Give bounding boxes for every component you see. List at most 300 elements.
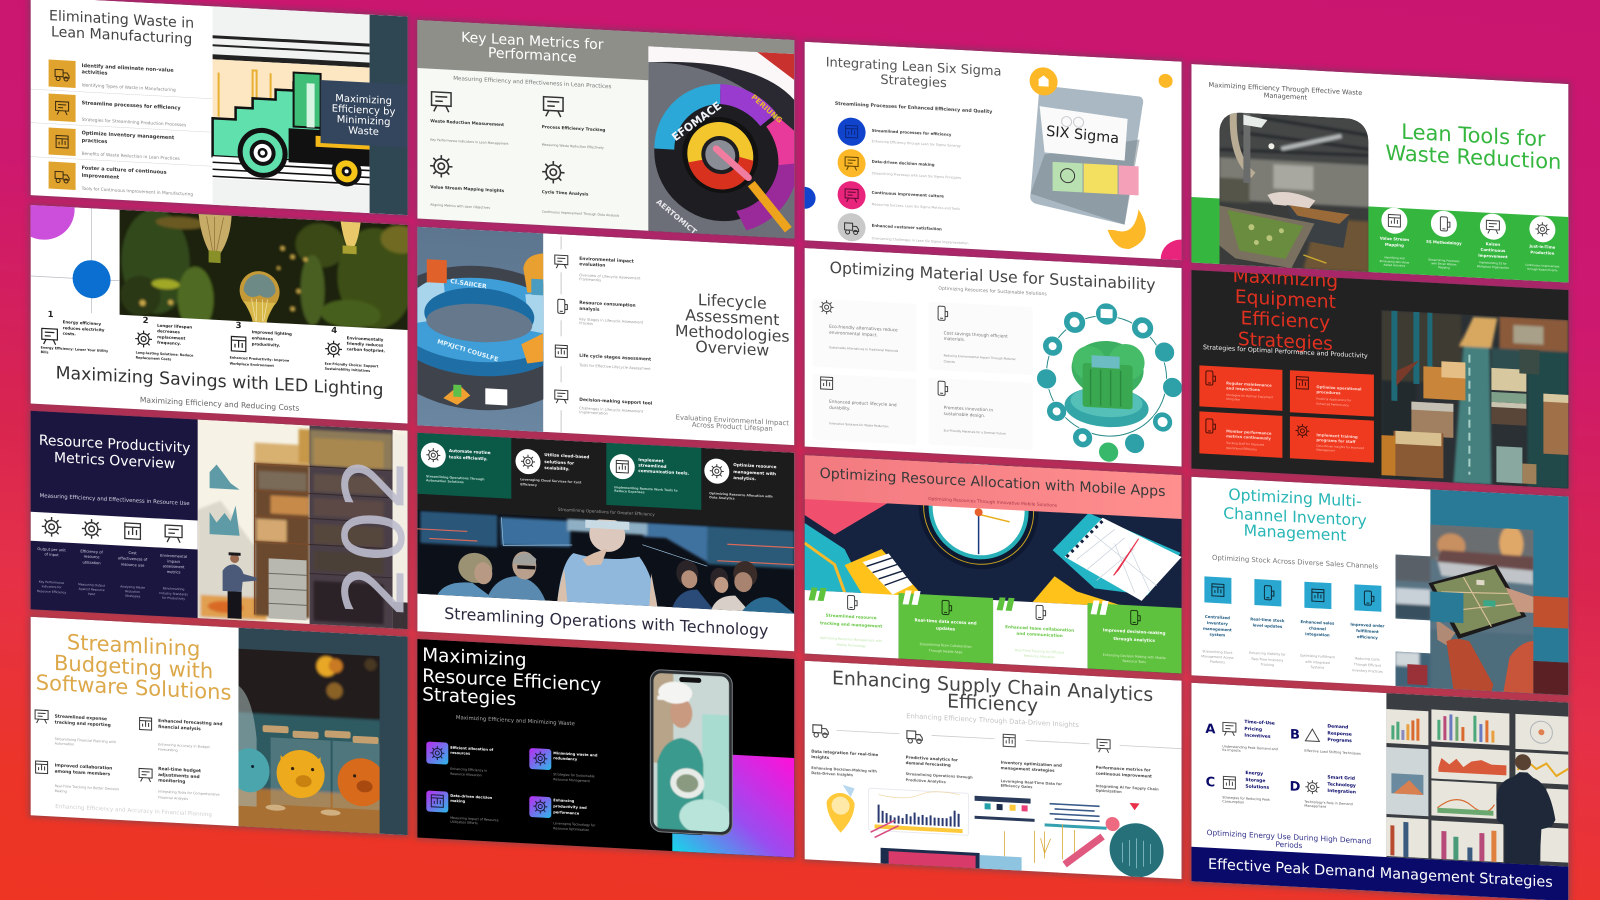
list: waste actions: activities [82,69,107,77]
step: performance metrics: Performance metrics for [1096,765,1151,773]
step 1: Energy efficiency [63,319,102,326]
tool: kaizen: Workplace Organization [1477,264,1509,270]
card: decision making: Enhancing Decision Making with Mobile [1103,653,1166,660]
list: waste actions [49,60,193,198]
step: data integration: Data-Driven Insights [811,771,853,777]
card: innovation: Promotes innovation in [944,405,993,414]
box: procedures: Enhanced Performance [1316,402,1349,407]
title [462,32,604,62]
feature: collaboration: Real-Time Tracking for Better Decision [55,784,119,791]
item: productivity: productivity and [553,804,587,810]
item: productivity [529,796,596,832]
metric: value stream: Value Stream Mapping Insights [430,184,505,193]
step: resource consumption: Key Stages in Lifecycle Assessment [579,317,644,325]
card: eco friendly: environmental impact. [829,330,878,338]
image: green cloud recycling bin [1037,299,1183,466]
feature: real-time budget [139,765,220,803]
step: data integration: Data integration for real-time [811,749,879,757]
panel: Optimizing Multi-Channel Inventory Management [1191,477,1568,696]
subtitle [676,413,789,434]
step: performance metrics [1096,739,1159,796]
card: product lifecycle: durability. [829,405,850,412]
title: Efficiency [1241,308,1330,334]
step 2: Long-lasting Solutions: Reduce [136,351,194,358]
box: maintenance: Regular maintenance [1226,380,1272,388]
list: waste actions: Optimize inventory management [82,130,175,141]
subtitle: Enhancing Efficiency Through Data-Driven Insights [906,712,1079,729]
analytics card: Optimizing Resource Allocation with [709,491,773,499]
subtitle: Management [1264,91,1308,102]
title: Metrics Overview [54,450,175,472]
channel: sales integration: Systems [1311,665,1325,670]
item: customer satisfaction [838,212,968,247]
subtitle: Across Product Lifespan [692,421,773,433]
card: product lifecycle [813,373,917,445]
icon: orange badge [1030,67,1058,96]
automate card: Streamlining Operations Through [426,474,484,481]
step: performance metrics: Integrating AI for Supply Chain [1096,784,1159,791]
step: inventory optimization: Leveraging Real-Time Data for [1001,779,1062,786]
strategy A: Time-of-Use [1244,719,1275,727]
shape: blue circle [73,259,111,299]
shape: gradient block [672,752,794,858]
step 3: productivity. [252,341,281,348]
item: allocation: Enhancing Efficiency in [450,767,487,773]
metric labels: resource use [121,562,145,568]
box: performance metrics [1199,411,1282,458]
box: performance metrics: Operational Efficiency [1226,446,1257,451]
title: Lifecycle [698,290,767,313]
strategy A [1205,717,1278,755]
metric labels: Cost [129,551,137,555]
tool: just in time [1525,215,1559,273]
panel: Streamlining Operations with Technology [417,433,794,652]
channel: centralized: Management Across [1201,654,1234,660]
title: Enhancing Supply Chain Analytics [832,667,1153,706]
card: eco friendly: Eco-friendly alternatives reduce [829,324,898,333]
shape: small orange dot [1159,73,1173,88]
metric notes: Indicators for [42,584,62,589]
card: resource tracking: Optimizing Resource Management with [820,636,882,643]
step: predictive analytics: demand forecasting [906,760,951,767]
feature: forecasting: Forecasting [158,747,178,752]
panel: Maximizing Resource Efficiency Strategies [417,639,794,858]
metric: value stream: Aligning Metrics with Lean Objectives [430,203,490,210]
item: waste: Resource Management [553,777,591,783]
image: six sigma tablet [1030,85,1143,226]
strategy A: Pricing [1244,726,1262,733]
item: customer satisfaction: Overcoming Challenges in Lean Six Sigma Implementation [872,236,968,245]
step 3: Workplace Environment [230,362,274,368]
item: productivity: performance [553,810,580,816]
title: Efficiency [947,690,1038,717]
callout: Maximizing Efficiency by Minimizing Waste: Minimizing [337,114,390,128]
header band [805,455,1182,519]
item: streamlined: Streamlined processes for efficiency [872,128,952,137]
image: waste sorting factory [1219,111,1369,272]
step: environmental impact: Overview of Lifecycle Assessment [579,273,641,281]
analytics card: Data Analytics [709,495,735,501]
step 2: Replacement Costs [136,356,171,361]
subtitle: Periods [1275,840,1302,850]
title: Strategies [880,73,947,91]
step: inventory optimization: Efficiency Gains [1001,784,1032,789]
tool: kaizen: Kaizen [1486,241,1500,247]
step: environmental impact: Frameworks [579,277,601,282]
analytics card [704,458,777,503]
feature: real-time budget: adjustments and [158,772,200,780]
subtitle: Maximizing Efficiency and Reducing Costs [140,395,299,413]
card: product lifecycle: Enhanced product lifecycle and [829,399,897,408]
metric: cycle time: Continuous Improvement Through Data Analysis [542,210,620,218]
list: waste actions: Streamline processes for efficiency [82,100,181,112]
subtitle: Measuring Efficiency and Effectiveness in Lean Practices [453,76,611,90]
tool: value stream: Value Stream [1380,235,1409,242]
step: predictive analytics: Predictive analytics for [906,755,958,762]
box: maintenance [1199,365,1282,411]
card: decision making: Improved decision-making [1103,627,1165,636]
box: procedures: Optimize operational [1316,384,1361,392]
step: resource consumption: Process [579,321,593,326]
feature: expense tracking: Automation [55,741,74,747]
strategy B: Demand [1327,723,1348,731]
cloud card: Efficiency [520,482,537,487]
communication card: streamlined [638,463,667,469]
step 2: replacement [157,334,186,341]
step: decision making [555,390,653,418]
strategy D: Integration [1327,788,1356,795]
card: eco friendly: Sustainable Alternatives to Traditional Materials [829,345,899,353]
channel: order fulfillment [1350,584,1385,674]
communication card [610,454,689,497]
step 1: Bills [41,350,48,354]
card: eco friendly [813,298,917,372]
channel: sales integration: with Integrated [1305,660,1330,665]
card: innovation: Eco-Friendly Materials for a Greener Future [944,428,1006,436]
title: Lean Tools for [1401,119,1546,151]
strategy C: Strategies for Reducing Peak [1222,795,1270,802]
tool: just in time: Just-in-Time [1528,243,1556,250]
title [1223,485,1367,546]
metric: waste reduction: Waste Reduction Measurement [430,118,504,127]
strategy B: Programs [1327,737,1352,744]
cloud card: solutions for [544,459,575,466]
metric notes: Measuring Output [78,582,106,588]
shape: teal puzzle block [1430,591,1463,623]
metric labels: resource [84,555,100,559]
channel: order fulfillment: efficiency [1357,634,1378,640]
tool: kaizen: Improvement [1478,253,1508,259]
panel: Lean Tools for Waste Reduction [1191,64,1568,283]
subtitle [1209,81,1362,105]
communication card: Implement [638,457,664,463]
metric notes: Reduction [125,589,140,594]
step 4: carbon footprint. [347,346,386,353]
channel: real-time stock: Real-time stock [1250,616,1285,623]
metric labels: of input [44,552,59,557]
step: performance metrics: continuous improvement [1096,771,1152,779]
subtitle: Measuring Efficiency and Effectiveness in Resource Use [40,493,190,507]
panel: Enhancing Supply Chain Analytics Efficiency [805,661,1182,880]
strategy B: Response [1327,730,1352,738]
cloud card: Leveraging Cloud Services for Cost [520,477,582,485]
subtitle: Optimizing Energy Use During High Demand [1207,828,1371,846]
metric: process tracking: Process Efficiency Tracking [542,124,605,132]
image: warehouse shelves with man [198,420,424,631]
title: Strategies [422,684,516,710]
feature: expense tracking: tracking and reporting [55,719,111,728]
channel: real-time stock: Tracking [1260,662,1274,667]
title: Assessment [685,305,779,329]
item: continuous improvement [838,180,960,215]
tool: value stream: Mapping [1385,242,1404,248]
item: data: Measuring Impact of Resource [450,816,499,822]
panel: Integrating Lean Six Sigma Strategies [794,41,1203,283]
metric labels: utilization [83,560,101,565]
metric notes: Strategies [125,594,141,599]
item: waste: redundancy [553,756,578,762]
tool: just in time: through Kaizen Events [1527,267,1558,272]
strategy A: Incentives [1244,733,1271,740]
panel: Optimizing Material Use for Sustainability [805,248,1183,467]
list: waste actions: Foster a culture of continuous [82,165,167,176]
step 3: enhances [252,335,274,341]
step: data integration: insights [811,754,830,760]
title: Key Lean Metrics for [461,30,604,53]
item: continuous improvement: Continuous improvement culture [872,190,944,199]
box: performance metrics: Monitor performance [1226,428,1272,436]
subtitle: Enhancing Efficiency and Accuracy in Financial Planning [55,804,212,818]
strategy D: Technology [1327,781,1356,789]
metric notes: for Productivity [162,596,185,601]
feature: expense tracking [35,710,116,749]
strategy C [1206,768,1270,806]
metric labels: effectiveness of [118,556,148,562]
image: glowing bulbs in forest [120,210,408,330]
step 2: 2 [143,316,149,326]
tool: 5S: 5S Methodology [1426,239,1462,246]
card: real-time data: Real-time data access and [915,617,977,626]
list: waste actions: Tools for Continuous Improvement in Manufacturing [81,186,193,198]
strategy C: Consumption [1222,799,1244,804]
step 4: 4 [331,326,337,336]
channel: centralized: system [1210,632,1225,637]
tool: kaizen: Continuous [1481,247,1506,253]
analytics card: analytics. [733,475,756,481]
footer band title: Effective Peak Demand Management Strategies [1208,857,1553,891]
card: resource tracking: Streamlined resource [826,613,877,620]
card: product lifecycle: Innovative Solutions for Waste Reduction [829,421,889,428]
card: real-time data: Through Mobile Apps [928,649,963,654]
subtitle [1207,828,1371,854]
step: predictive analytics: Predictive Analytics [906,778,946,784]
item: streamlined [838,117,961,151]
panel: Streamlining Budgeting with Software Solutions [31,617,408,842]
card: cost savings: materials. [944,336,965,343]
card: team collaboration: and communication [1016,631,1063,638]
tool: just in time: Production [1530,249,1555,256]
metric labels: assessment [163,564,185,569]
image: performance gauge [648,46,803,243]
feature: forecasting: Enhanced forecasting and [158,718,223,727]
title: Optimizing Material Use for Sustainability [830,258,1156,294]
feature: collaboration: among team members [55,768,110,777]
card: decision making [1088,600,1182,674]
step: predictive analytics: Streamlining Operations through [906,772,973,780]
image: six sigma tablet: SIX Sigma [1046,124,1119,147]
step: life cycle stages: Tools for Effective Lifecycle Assessment [578,363,651,371]
feature: expense tracking: Streamlined expense [55,713,107,722]
title: Resource Productivity [39,433,190,457]
strategy D: Technology's Role in Demand [1303,800,1353,806]
title: Overview [695,337,769,360]
step 1 [40,310,108,354]
subtitle: Evaluating Environmental Impact [676,413,789,427]
card: cost savings: Reducing Environmental Impact Through Material [944,353,1016,361]
title [1233,266,1338,355]
title: Eliminating Waste in [49,8,194,32]
title [37,634,230,700]
strategy D: Management [1304,804,1327,809]
step: performance metrics: Optimization [1096,789,1122,794]
item: data driven: Streamlining Processes with Lean Six Sigma Principles [872,171,961,180]
tool: 5S [1426,210,1462,270]
card: decision making: Resource Tools [1122,659,1146,664]
panel: Lifecycle Assessment Methodologies Overview [417,226,794,446]
card: cost savings [929,302,1033,375]
strategy D [1290,772,1356,810]
box: procedures [1290,370,1374,417]
list: waste actions: Identify and eliminate non-value [82,63,174,74]
title: Streamlining [67,629,200,661]
channel: sales integration [1300,581,1336,670]
icon strip [31,512,198,550]
tool: value stream: Eliminating Non-Value [1380,259,1409,265]
feature: real-time budget: Real-time budget [158,766,201,774]
chart illustration [827,784,1164,879]
item: waste: Strategies for Sustainable [553,772,595,778]
metric notes: Benchmarking [163,586,185,591]
cloud card: scalability. [544,465,570,471]
channel: order fulfillment: Reducing Costs [1355,656,1380,662]
box: training [1290,416,1374,463]
step 4 [325,326,386,374]
step: resource consumption [558,299,644,329]
step: life cycle stages: Life cycle stages assessment [579,353,651,363]
panel: Optimizing Resource Allocation with Mobile Apps [805,440,1182,674]
card: real-time data: Streamlining Team Collaboration [920,642,972,649]
channel: real-time stock: Enhancing Visibility for [1249,651,1286,657]
card: team collaboration: Real-Time Tracking for Efficient [1015,648,1065,655]
step: data integration: Enhancing Decision-Making with [811,766,877,774]
title: Optimizing Multi- [1228,486,1362,511]
title [675,289,790,361]
feature: real-time budget: Financial Analysis [158,795,188,801]
panel: Key Lean Metrics for Performance [417,20,803,243]
step: data integration [811,725,879,779]
strategy D: D [1290,779,1301,795]
title: Maximizing Savings with LED Lighting [56,363,384,401]
callout: Maximizing Efficiency by Minimizing Waste: Maximizing [335,93,392,107]
card: real-time data: updates [936,625,956,632]
channel: real-time stock [1249,579,1286,668]
item: waste: Minimizing waste and [553,751,598,758]
panel: Resource Productivity Metrics Overview [31,411,424,631]
shape: pink corner [1161,239,1203,283]
tool: kaizen [1477,213,1509,270]
header band: Optimizing Resources Through Innovative Mobile Solutions [928,496,1058,509]
tool: 5S: with Seven Wastes [1431,261,1457,267]
tool: just in time: Continuous Improvement [1525,263,1559,269]
card: innovation: sustainable design. [944,411,985,419]
image: circular lifecycle ring: MPXJCTI COUSLFE [436,338,499,363]
subtitle: Streamlining Operations for Greater Efficiency [558,507,655,517]
metric notes: Key Performance [39,580,64,585]
strategy C: Energy [1245,770,1263,777]
item: data driven [838,148,961,183]
title: Equipment [1235,287,1336,313]
channel: sales integration: Optimizing Fulfillment [1300,653,1336,659]
step 1: costs. [63,331,76,336]
feature: real-time budget: Integrating Tools for Comprehensive [158,789,220,797]
title: Methodologies [675,321,790,346]
item: productivity: Resource Optimization [553,826,589,832]
title: Lean Manufacturing [51,24,192,48]
shape: blue half circle [794,186,816,209]
card: real-time data [899,590,993,664]
channel: centralized: Streamlining Stock [1202,649,1233,655]
step: environmental impact [555,254,641,285]
title [49,8,194,48]
step 1: reduces electricity [63,325,105,332]
strategy B: Effective Load Shifting Techniques [1304,749,1361,756]
analytics card: Optimize resource [733,462,777,469]
tool: kaizen: Implementing 5S for [1479,260,1508,266]
metric: waste reduction: Key Performance Indicators in Lean Management [430,138,509,146]
step: inventory optimization: management strategies [1001,765,1055,773]
image: warehouse shelves with man: 202 [326,454,424,620]
item: customer satisfaction: Enhanced customer satisfaction [872,223,942,231]
metric notes: Input [88,592,96,596]
metric labels: Efficiency of [80,549,104,555]
shape: purple circle [30,205,75,240]
panel: Eliminating Waste in Lean Manufacturing [31,0,408,216]
strategy D: Smart Grid [1327,774,1355,782]
tool: value stream: Identifying and [1384,255,1405,260]
title [826,55,1001,94]
list: waste actions: Strategies for Streamlining Production Processes [82,117,187,128]
image: phone with recycling worker [650,669,732,837]
metric labels: Environmental [160,554,187,559]
list: waste actions: Benefits of Waste Reduction in Lean Practices [82,151,181,162]
step: environmental impact: evaluation [579,261,605,269]
card: decision making: through analytics [1113,636,1155,643]
channel: centralized: Platforms [1210,660,1225,664]
step: life cycle stages [555,345,651,371]
title: Channel Inventory [1223,504,1367,530]
title: Management [1244,521,1346,545]
channel: centralized: management [1203,626,1232,632]
item: data: making [450,799,466,804]
card: innovation [929,378,1033,450]
subtitle: Optimizing Stock Across Diverse Sales Channels [1212,554,1378,571]
step 4: Environmentally [347,335,384,342]
feature: forecasting: Enhancing Accuracy in Budget [158,742,211,749]
channel: order fulfillment: Improved order [1350,622,1385,628]
title: Budgeting with [54,650,213,683]
box: training: Management [1316,448,1336,453]
card: resource tracking: Mobile Technology [836,643,866,648]
